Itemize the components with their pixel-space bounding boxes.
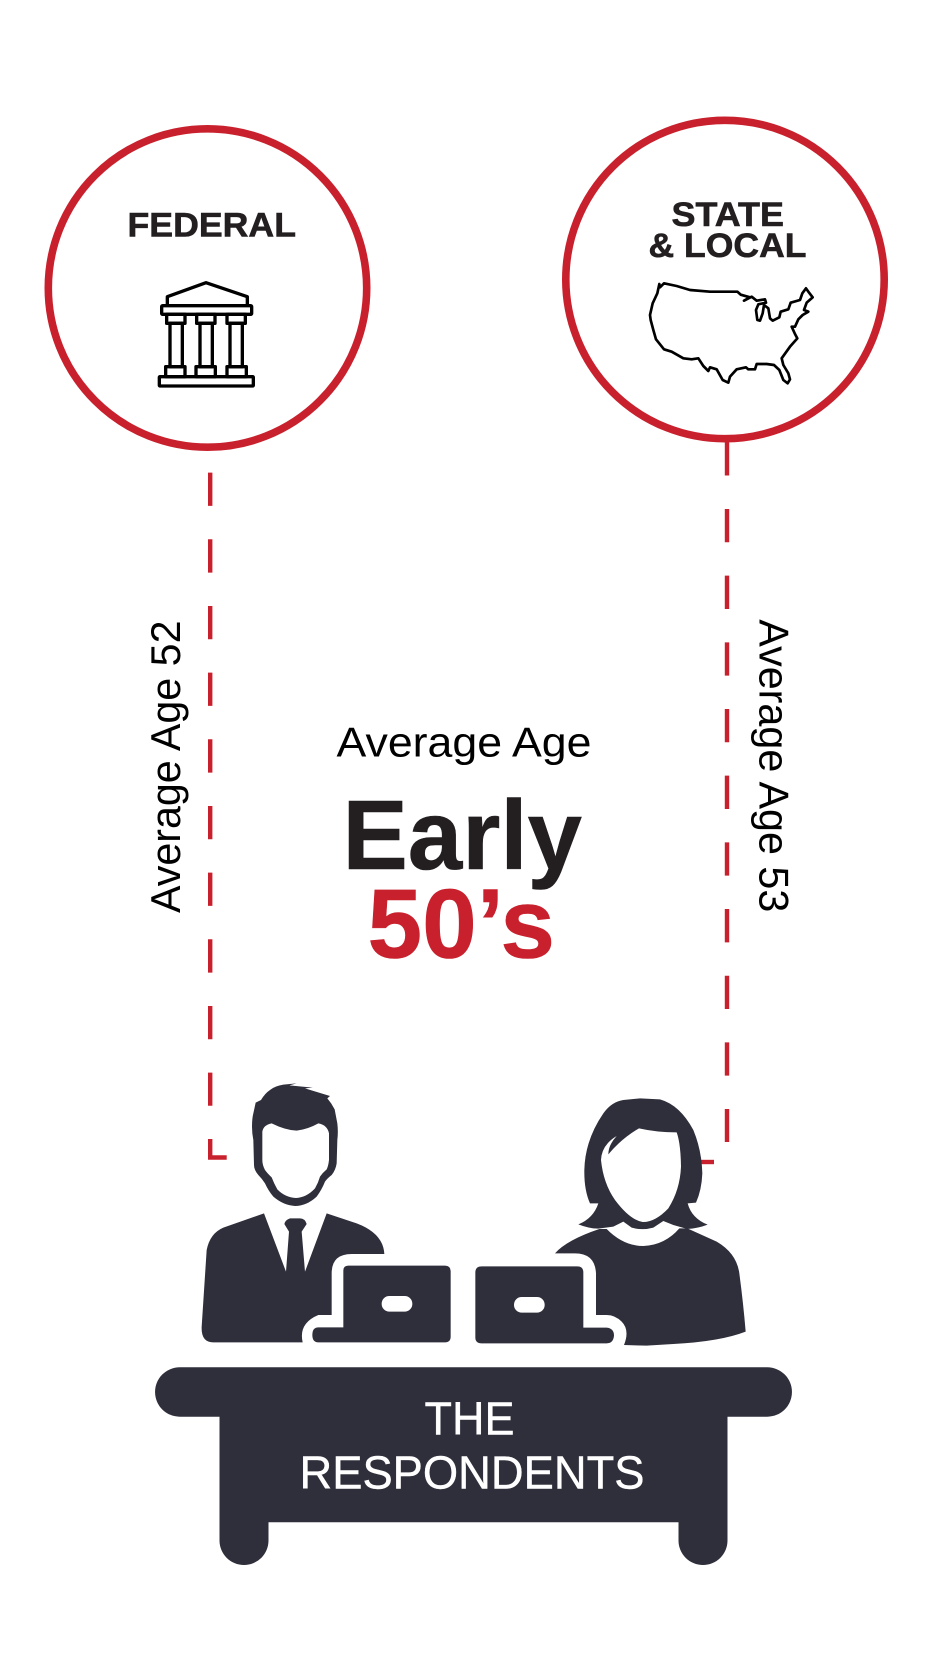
label: state and local average age: Average Age 53 [750,619,797,912]
circle outline: state and local [566,120,884,439]
man suit and tie [202,1213,384,1342]
woman hair and face [578,1098,708,1229]
desk label: RESPONDENTS [300,1446,644,1498]
connector: federal dashed line [210,473,227,1158]
desk label: THE [424,1392,514,1444]
man head and hair [252,1083,338,1206]
label: federal average age: Average Age 52 [142,620,189,913]
icon: government building [159,283,253,386]
circle outline: federal [48,129,367,447]
heading: state and local: & LOCAL [648,227,806,265]
panel: desk with label [155,1367,792,1565]
icon: map of the United States [650,283,813,383]
panel: state and local circle [566,120,884,439]
illustration: woman at laptop [475,1098,746,1346]
illustration: man at laptop [202,1083,451,1342]
heading: state and local: STATE [672,196,784,234]
caption: average age: Average Age [336,719,592,766]
man laptop [312,1266,451,1342]
desk shape [155,1367,792,1565]
headline: early: Early [342,780,582,890]
woman torso [555,1228,746,1346]
headline: 50's: 50’s [368,868,555,978]
connector: state and local dashed line [701,442,727,1162]
text block: overall average age [336,719,592,978]
woman laptop [475,1266,614,1343]
panel: federal circle [48,129,367,447]
heading: federal: FEDERAL [128,207,296,245]
